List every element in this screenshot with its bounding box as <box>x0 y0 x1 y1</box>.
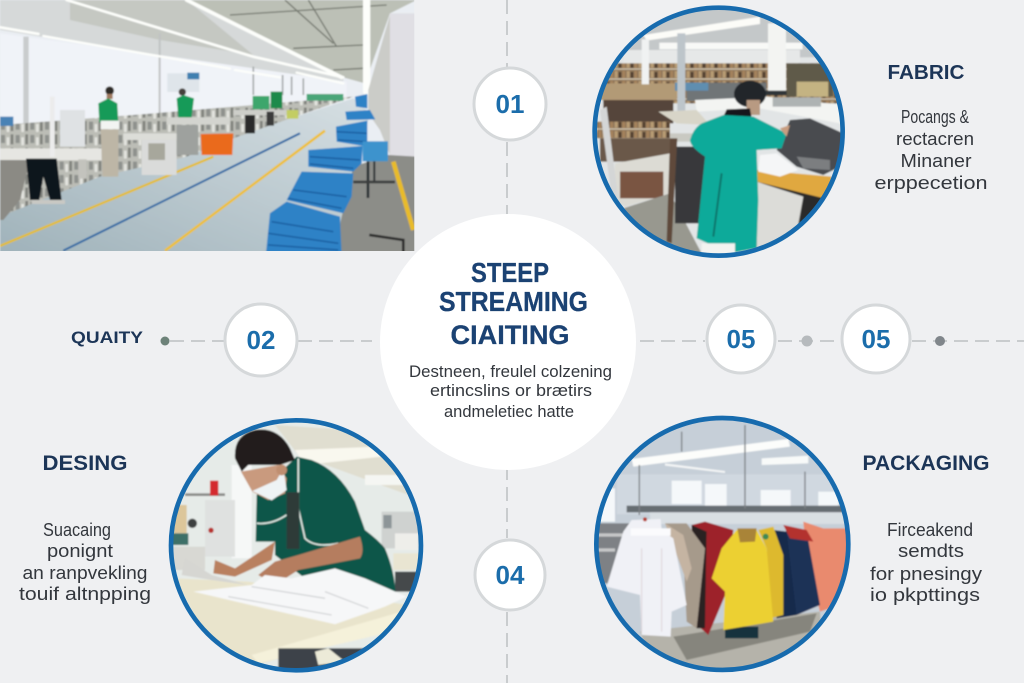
step badge 04 <box>475 540 545 610</box>
white pillar <box>768 23 786 92</box>
connector dots <box>160 336 945 346</box>
center body text <box>409 362 612 421</box>
green machines <box>253 96 269 109</box>
dark fabric <box>777 118 843 175</box>
step badge 05 left <box>707 305 775 373</box>
floor <box>640 612 823 675</box>
fabric <box>193 568 407 624</box>
hanger rods <box>639 425 805 515</box>
text: fabric body: Pocangs & <box>901 107 969 127</box>
center body text: Destneen, freulel colzening <box>409 362 612 381</box>
head <box>241 465 287 500</box>
step badge 01: 01 <box>496 89 524 119</box>
worker <box>734 81 766 107</box>
text: packaging body: Firceakend <box>887 520 973 540</box>
blue stacks <box>266 94 375 253</box>
text: fabric body: erppecetion <box>874 173 988 193</box>
worker legs <box>26 159 62 200</box>
worker 2 <box>179 88 186 96</box>
step badge 02: 02 <box>247 325 275 355</box>
text: packaging body <box>870 520 982 605</box>
rail <box>627 506 843 512</box>
floor tool <box>369 235 403 253</box>
floor <box>624 194 702 252</box>
ceiling <box>628 10 815 58</box>
orange bin <box>201 133 233 155</box>
floor <box>0 98 370 253</box>
text: desing body: ponignt <box>47 541 113 561</box>
center title: STREAMING <box>439 286 588 317</box>
counter back <box>695 97 843 124</box>
ceiling lights <box>0 0 367 92</box>
photo circle: packaging <box>587 412 857 678</box>
back wall <box>617 474 850 514</box>
text: packaging body: io pkpttings <box>870 585 980 605</box>
steps left <box>597 523 630 583</box>
text: packaging body: for pnesingy <box>870 564 982 584</box>
step badge 01 <box>474 68 546 140</box>
shelves <box>603 63 850 103</box>
ceiling lights <box>632 439 790 467</box>
photo: factory floor <box>0 0 420 257</box>
white wall <box>170 56 344 88</box>
text: desing body: Suacaing <box>43 520 111 540</box>
text: packaging body: semdts <box>898 541 964 561</box>
table top <box>757 170 832 199</box>
right wall <box>390 13 417 157</box>
sign <box>167 73 199 92</box>
table <box>175 578 408 665</box>
worker body <box>256 457 396 595</box>
text: desing body: touif altnpping <box>19 584 151 604</box>
worker 1 <box>105 86 114 95</box>
center title: STEEP <box>471 257 549 288</box>
step badge 05 right <box>842 305 910 373</box>
machine right <box>382 512 422 548</box>
paper <box>758 153 798 177</box>
text: desing body <box>19 520 151 604</box>
heading: packaging: PACKAGING <box>862 452 990 475</box>
step badge 04: 04 <box>496 560 525 590</box>
heading: fabric: FABRIC <box>888 62 964 84</box>
center title: CIAITING <box>450 320 570 350</box>
center body text: ertincslins or brætirs <box>430 381 592 400</box>
center title <box>439 257 588 350</box>
center body text: andmeletiec hatte <box>444 402 574 421</box>
text: fabric body <box>874 107 988 193</box>
shelf post <box>600 106 615 194</box>
blue table <box>363 141 388 161</box>
cabinet <box>755 181 822 247</box>
dark leg <box>245 115 255 133</box>
white shirt <box>607 519 687 637</box>
machine left <box>205 500 235 557</box>
arms <box>213 542 275 577</box>
text: fabric body: rectacren <box>896 129 974 149</box>
coats <box>803 522 850 612</box>
machines <box>0 97 353 217</box>
ceiling blur <box>276 425 408 495</box>
text: desing body: an ranpvekling <box>22 563 148 583</box>
floor stripes <box>0 131 413 251</box>
desk frame <box>669 133 693 142</box>
upper wall <box>0 0 343 87</box>
heading: desing: DESING <box>42 452 127 475</box>
step badge 05 right: 05 <box>862 324 890 354</box>
text: fabric body: Minaner <box>900 151 972 171</box>
yellow garment <box>758 527 783 618</box>
photo circle: design <box>162 412 432 678</box>
label: quaity: QUAITY <box>71 328 144 347</box>
step badge 02 <box>225 304 297 376</box>
step badge 05 left: 05 <box>727 324 755 354</box>
photo circle: fabric <box>587 0 853 263</box>
ceiling <box>187 0 417 83</box>
center circle <box>380 214 636 470</box>
